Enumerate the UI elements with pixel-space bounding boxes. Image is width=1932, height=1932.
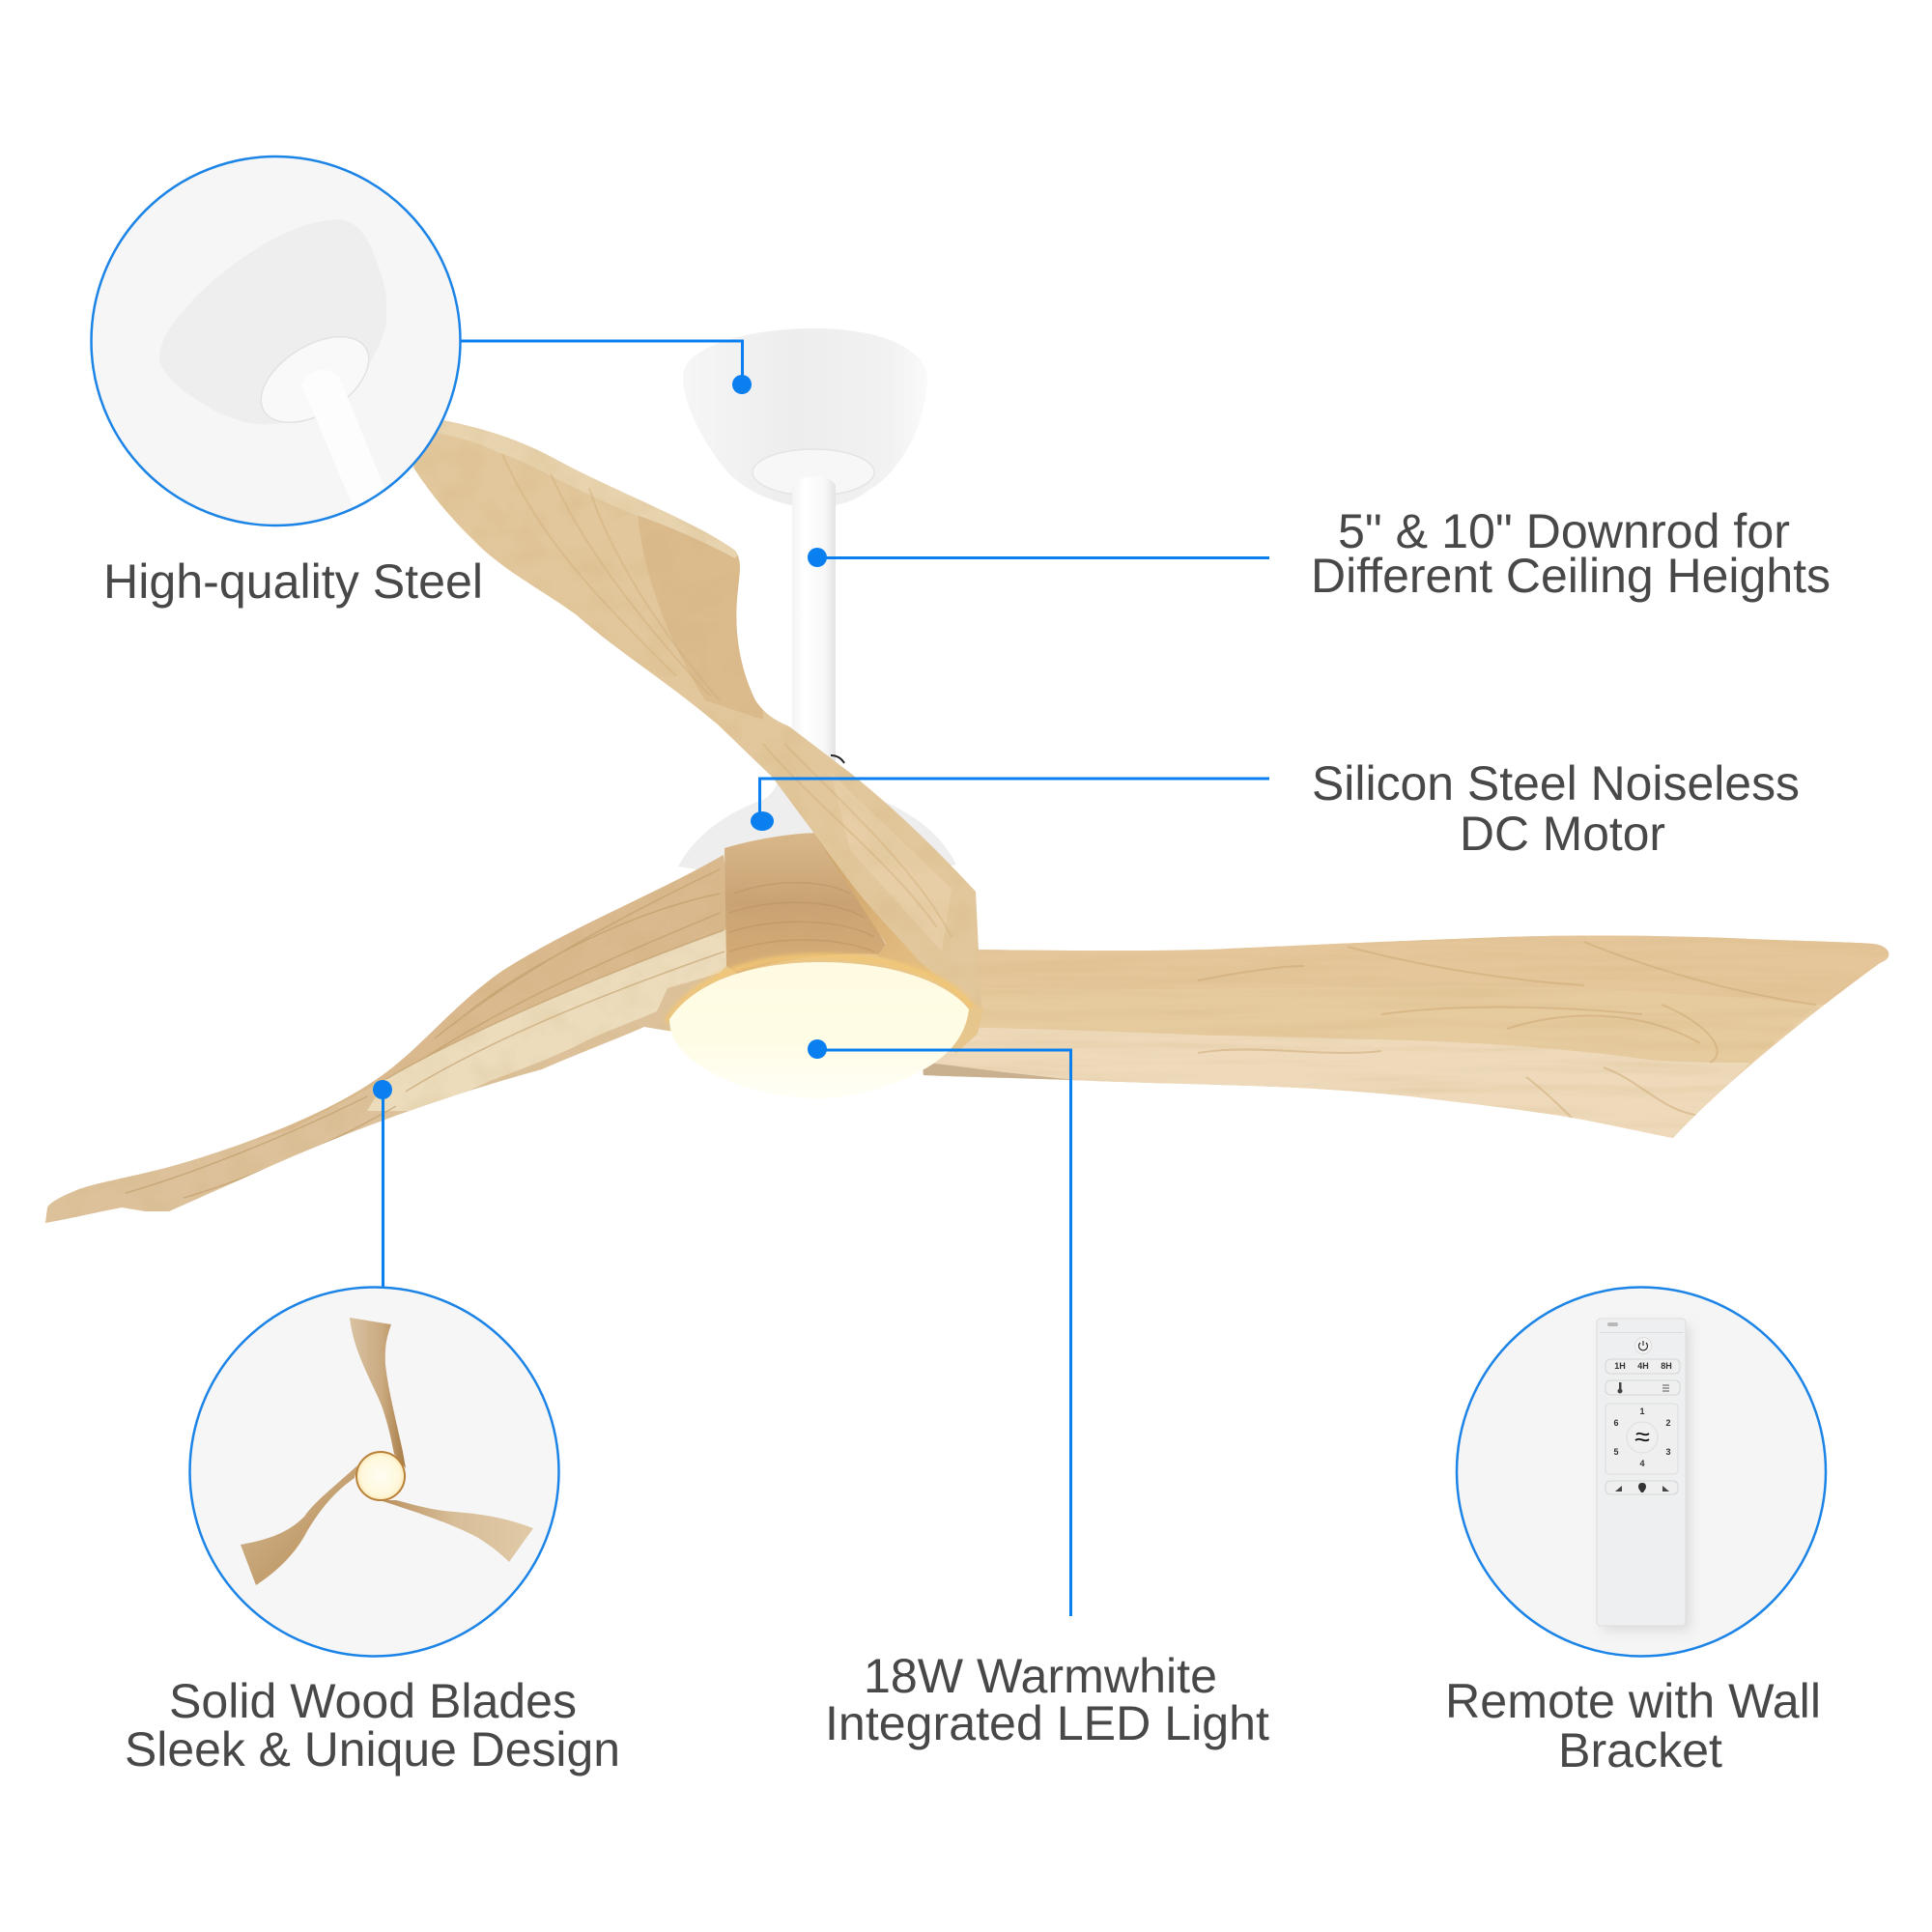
remote LED and header (1600, 1322, 1684, 1333)
label: motor: Silicon Steel Noiseless (1312, 756, 1800, 810)
mode buttons (1605, 1380, 1680, 1395)
twisting top blade (406, 411, 995, 1014)
inner golden face (814, 821, 981, 1007)
label: High-quality Steel: High-quality Steel (103, 554, 483, 609)
hub wood (724, 833, 886, 974)
speed dial: 3 (1665, 1447, 1671, 1457)
timer buttons: 1H (1614, 1361, 1626, 1371)
callout line: blade (373, 1080, 392, 1291)
label: downrod (1311, 504, 1831, 603)
inset rod (315, 396, 348, 417)
inset flange (261, 336, 369, 423)
label: LED light (825, 1649, 1269, 1750)
callout line: downrod (808, 548, 1269, 567)
callout line: ceiling canopy (460, 341, 752, 394)
speed dial (1605, 1404, 1678, 1474)
inset right blade (380, 1500, 533, 1562)
downrod (792, 477, 836, 777)
ceiling fan product (39, 328, 1903, 1236)
label: LED light: 18W Warmwhite (864, 1649, 1217, 1703)
right blade (923, 935, 1889, 1138)
label: downrod: Different Ceiling Heights (1311, 549, 1831, 603)
speed dial: 6 (1613, 1418, 1619, 1428)
label: downrod: 5" & 10" Downrod for (1338, 504, 1790, 558)
left blade (45, 855, 737, 1223)
inset left blade (241, 1465, 357, 1585)
inset canopy (159, 219, 386, 424)
light glow rim (667, 956, 972, 1022)
ceiling canopy (683, 328, 927, 506)
light warm rim (668, 953, 983, 1053)
timer buttons (1605, 1359, 1680, 1374)
remote body (1597, 1319, 1686, 1626)
speed dial: 5 (1613, 1447, 1619, 1457)
power button (1634, 1337, 1652, 1354)
label: remote: Remote with Wall (1445, 1674, 1821, 1728)
label: blades: Solid Wood Blades (169, 1674, 577, 1728)
label: remote (1445, 1674, 1821, 1777)
canopy flange (753, 449, 874, 496)
callout line: LED light (808, 1039, 1070, 1616)
inset circle: solid wood blades (189, 1287, 558, 1656)
light buttons (1605, 1481, 1678, 1494)
LED light dome (669, 962, 969, 1098)
remote shadow (1602, 1325, 1690, 1631)
speed dial: 1 (1639, 1406, 1645, 1416)
label: motor (1312, 756, 1800, 861)
label: LED light: Integrated LED Light (825, 1696, 1269, 1750)
label: remote: Bracket (1558, 1723, 1722, 1777)
inset circle: remote (1457, 1287, 1826, 1656)
motor housing (678, 769, 956, 889)
inset light (356, 1452, 405, 1500)
callout line: motor (751, 779, 1269, 831)
small black detail at rod base (831, 755, 844, 763)
speed dial: 4 (1639, 1459, 1645, 1468)
timer buttons: 8H (1661, 1361, 1672, 1371)
speed dial: 2 (1665, 1418, 1671, 1428)
inset top blade (350, 1318, 406, 1468)
label: blades: Sleek & Unique Design (125, 1722, 620, 1776)
timer buttons: 4H (1637, 1361, 1649, 1371)
label: blades (125, 1674, 620, 1776)
inset circle: high-quality steel canopy (91, 156, 460, 526)
blade face (406, 411, 995, 1014)
label: motor: DC Motor (1460, 807, 1665, 861)
